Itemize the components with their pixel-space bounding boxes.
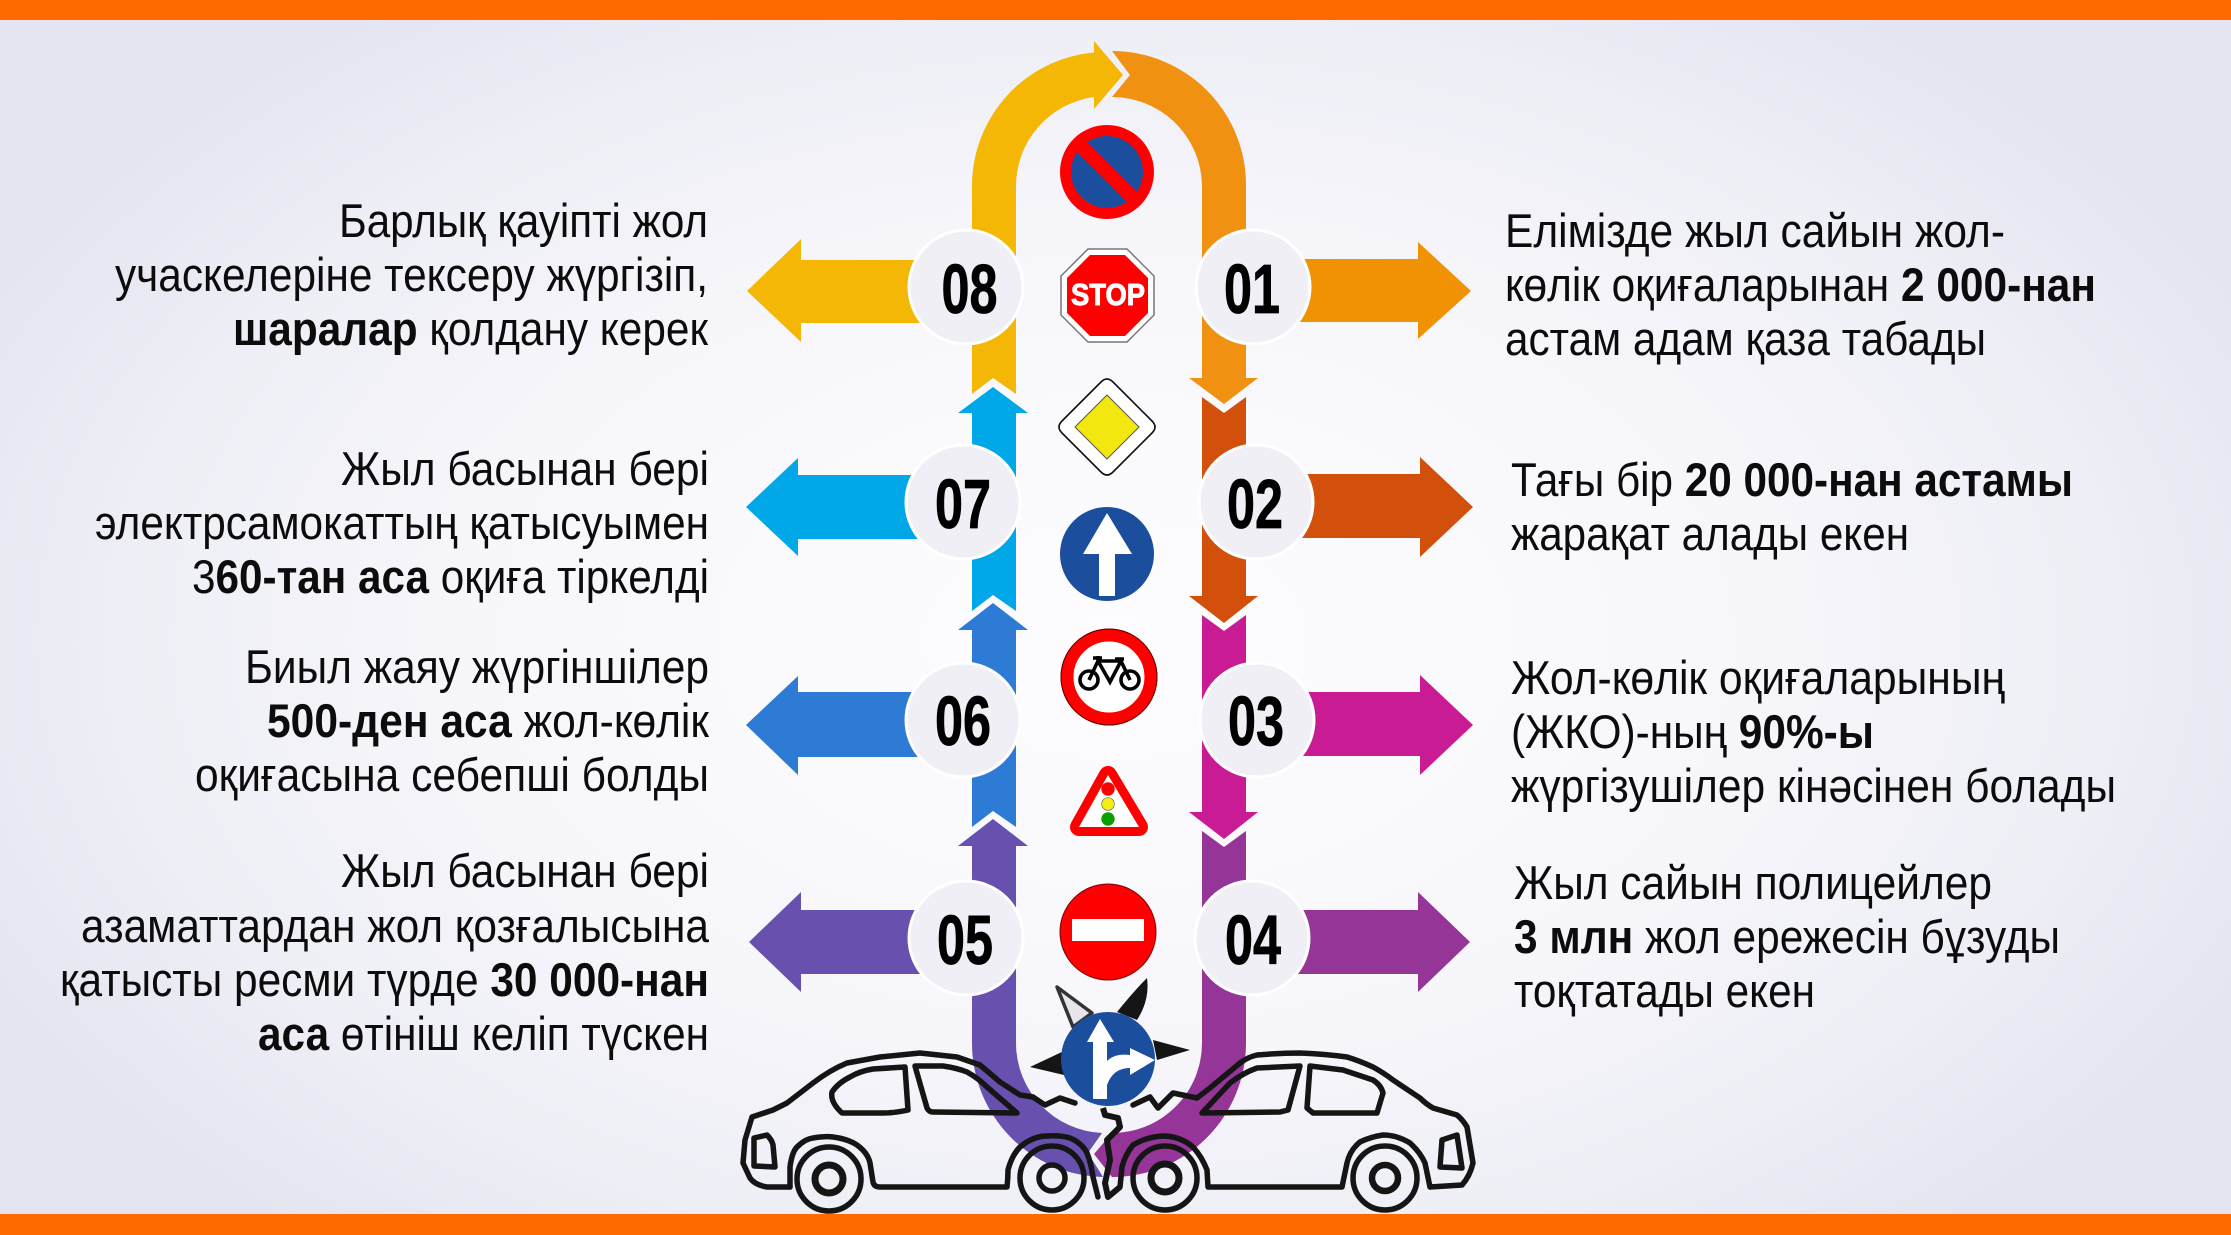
text: point 06: Биыл жаяу жүргіншілер <box>245 640 709 693</box>
badge 08 <box>909 230 1023 344</box>
icon: priority road sign <box>1059 379 1155 475</box>
arrow band: cyan 07 <box>958 387 1028 611</box>
badge 08: 08 <box>941 250 998 328</box>
bottom orange bar <box>0 1214 2231 1235</box>
arrow: 05 left violet <box>749 892 930 992</box>
arrow band: magenta 03 <box>1189 615 1258 839</box>
icon: no parking sign <box>1060 125 1154 219</box>
badge 02: 02 <box>1227 465 1283 543</box>
badge 03: 03 <box>1228 682 1284 760</box>
arrow: 07 left cyan <box>746 458 930 556</box>
text: point 04 <box>1514 856 2060 1017</box>
text: point 02: Тағы бір 20 000-нан астамы <box>1511 453 2073 506</box>
text: point 05: азаматтардан жол қозғалысына <box>81 899 710 952</box>
text: point 01: көлік оқиғаларынан 2 000-нан <box>1505 258 2096 311</box>
icon: no cycling sign <box>1061 629 1157 725</box>
text: point 05: қатысты ресми түрде 30 000-нан <box>60 953 709 1006</box>
badge 07: 07 <box>935 465 991 543</box>
text: point 02 <box>1511 453 2073 560</box>
text: point 01 <box>1505 204 2096 365</box>
badge 01: 01 <box>1224 250 1280 328</box>
text: point 01: астам адам қаза табады <box>1505 312 1986 365</box>
text: point 08: Барлық қауіпті жол <box>339 194 708 247</box>
badge 04 <box>1195 881 1309 995</box>
arrow band: dark orange 02 <box>1189 397 1258 623</box>
arrow band: orange 01 <box>1112 51 1258 404</box>
text: point 06: 500-ден аса жол-көлік <box>267 694 709 747</box>
text: point 08: шаралар қолдану керек <box>233 302 708 355</box>
icon: ahead only sign <box>1060 507 1154 601</box>
text: point 07: 360-тан аса оқиға тіркелді <box>192 550 709 603</box>
icon: straight or right sign <box>1061 1012 1155 1106</box>
text: point 02: жарақат алады екен <box>1511 507 1909 560</box>
text: point 03 <box>1511 651 2116 812</box>
text: point 03: жүргізушілер кінәсінен болады <box>1511 759 2116 812</box>
badge 03 <box>1200 663 1314 777</box>
badge 06: 06 <box>935 682 991 760</box>
arrow band: violet 05 <box>958 819 1103 1177</box>
text: point 05: Жыл басынан бері <box>341 844 709 897</box>
arrow band: yellow 08 <box>972 41 1123 394</box>
arrow band: blue 06 <box>958 603 1028 827</box>
vertical loop of arrows <box>958 41 1258 1177</box>
text: point 03: Жол-көлік оқиғаларының <box>1511 651 2005 704</box>
badge 05: 05 <box>937 901 993 979</box>
icon: crash burst <box>1030 978 1190 1075</box>
arrow: 03 right magenta <box>1290 675 1473 775</box>
icon: no entry sign <box>1060 884 1156 980</box>
text: point 04: 3 млн жол ережесін бұзуды <box>1514 910 2060 963</box>
badge 06 <box>906 663 1020 777</box>
arrow: 06 left blue <box>746 676 930 775</box>
text: point 06 <box>195 640 709 801</box>
text: point 07: электрсамокаттың қатысуымен <box>95 496 709 549</box>
arrow: 04 right purple <box>1290 892 1470 992</box>
text: point 08 <box>115 194 708 355</box>
arrow band: purple 04 <box>1094 831 1246 1177</box>
text: point 07: Жыл басынан бері <box>341 442 709 495</box>
badge 02 <box>1199 445 1313 559</box>
text: point 05 <box>60 844 710 1060</box>
text: point 04: тоқтатады екен <box>1514 964 1815 1017</box>
text: point 01: Елімізде жыл сайын жол- <box>1505 204 2005 257</box>
icon: traffic lights warning sign <box>1079 775 1139 827</box>
arrow: 08 left yellow <box>747 239 930 342</box>
text: point 06: оқиғасына себепші болды <box>195 748 709 801</box>
icon: stop sign <box>1061 249 1154 342</box>
badge 05 <box>909 881 1023 995</box>
text: point 04: Жыл сайын полицейлер <box>1514 856 1992 909</box>
illustration: impact crack <box>1103 1108 1120 1197</box>
arrow: 02 right dark orange <box>1290 457 1473 557</box>
illustration: right crashed car <box>1120 1053 1473 1210</box>
badge 04: 04 <box>1225 901 1281 979</box>
text: point 08: учаскелеріне тексеру жүргізіп, <box>115 248 708 301</box>
text: point 07 <box>95 442 709 603</box>
badge 07 <box>906 445 1020 559</box>
text: point 05: аса өтініш келіп түскен <box>258 1007 709 1060</box>
top orange bar <box>0 0 2231 20</box>
illustration: left crashed car <box>743 1053 1098 1211</box>
icon: stop sign: STOP <box>1071 277 1145 312</box>
arrow: 01 right orange <box>1290 242 1471 339</box>
text: point 03: (ЖКО)-ның 90%-ы <box>1511 705 1874 758</box>
badge 01 <box>1196 230 1310 344</box>
